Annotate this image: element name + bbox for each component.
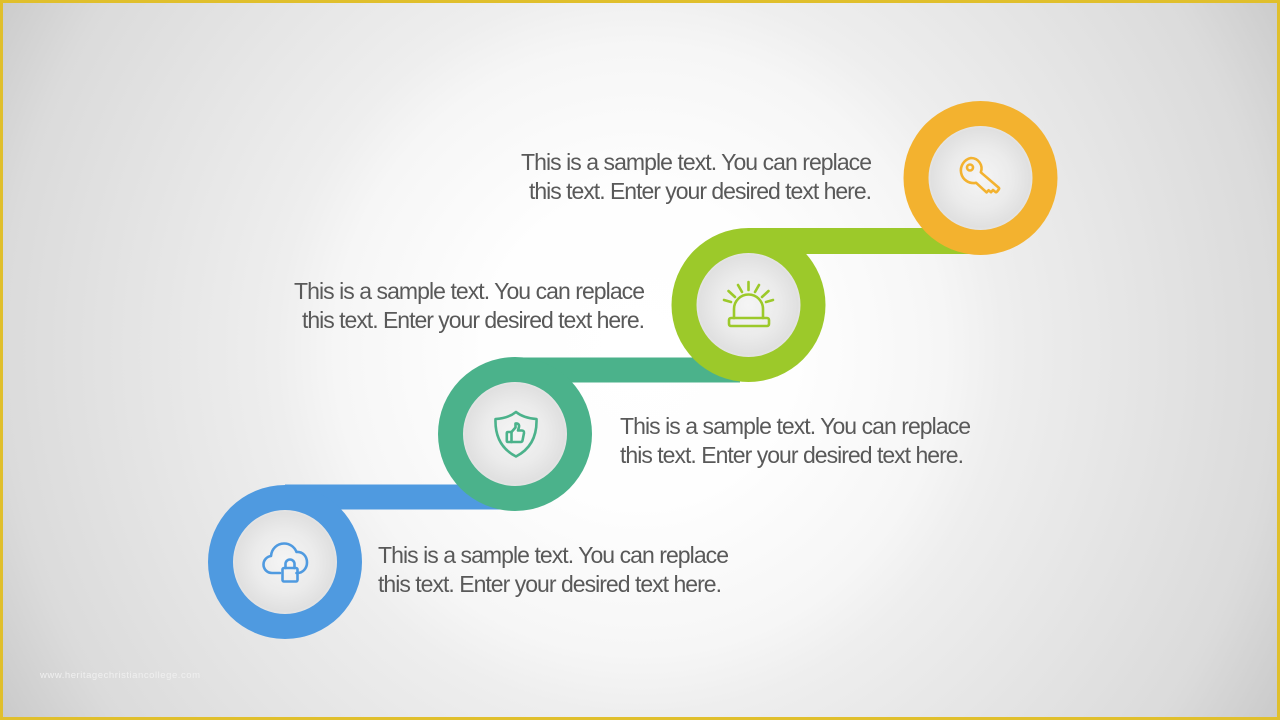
text block: step 2: this text. Enter your desired text here. bbox=[620, 442, 964, 468]
text block: step 1: this text. Enter your desired text here. bbox=[378, 571, 722, 597]
icon: cloud with padlock bbox=[264, 544, 307, 582]
step 1: blue ring and connector bbox=[208, 484, 510, 639]
icon: alarm beacon bbox=[724, 282, 773, 326]
step 3 inner disc bbox=[696, 253, 800, 357]
text block: step 4: This is a sample text. You can replace bbox=[521, 149, 872, 175]
step 3: lime ring and connector bbox=[672, 228, 973, 382]
text block: step 3: this text. Enter your desired text here. bbox=[302, 307, 645, 333]
text block: step 2: This is a sample text. You can replace bbox=[620, 413, 971, 439]
step 2: teal ring and connector bbox=[438, 357, 740, 511]
watermark: www.heritagechristiancollege.com bbox=[39, 670, 200, 681]
icon: key bbox=[961, 158, 999, 192]
text block: step 3: This is a sample text. You can replace bbox=[294, 278, 645, 304]
step 4: orange ring bbox=[904, 101, 1058, 255]
step 2 inner disc bbox=[463, 382, 567, 486]
icon: shield with thumbs up bbox=[495, 412, 537, 456]
step 4 inner disc bbox=[928, 126, 1032, 230]
text block: step 1: This is a sample text. You can replace bbox=[378, 542, 729, 568]
step 1 inner disc bbox=[233, 510, 337, 614]
text block: step 4: this text. Enter your desired text here. bbox=[529, 178, 872, 204]
